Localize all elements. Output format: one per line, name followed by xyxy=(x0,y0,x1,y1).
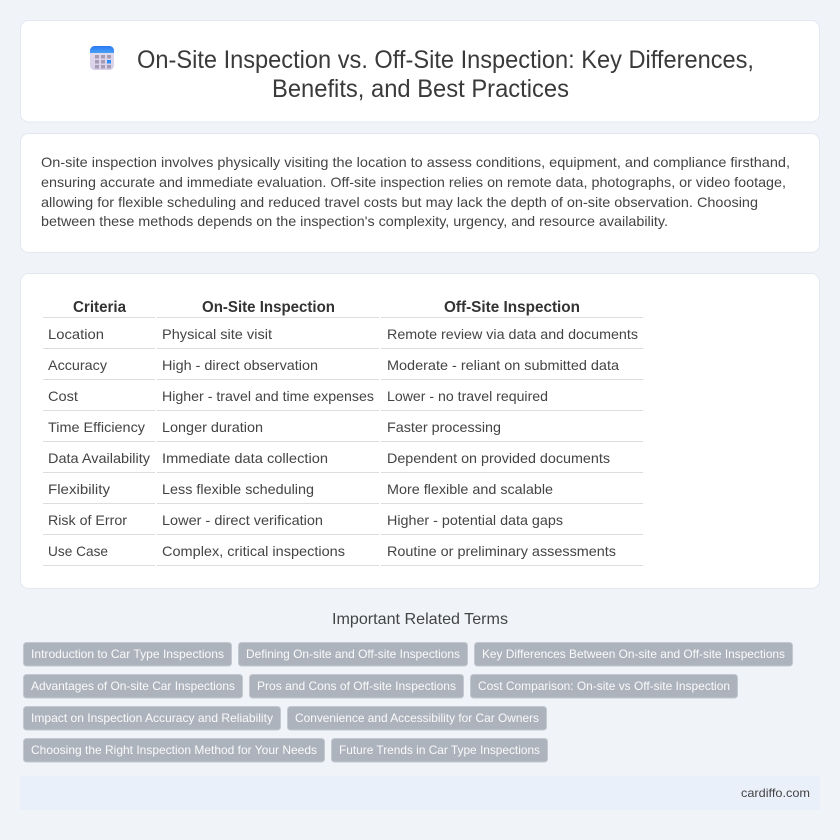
row: Risk of Error xyxy=(48,512,563,528)
row: Cost: Cost xyxy=(48,388,78,404)
icon: calendar xyxy=(90,46,114,70)
row: Accuracy: High - direct observation xyxy=(162,357,318,373)
row: Time Efficiency: Time Efficiency xyxy=(48,419,145,435)
row: Accuracy: Accuracy xyxy=(48,357,107,373)
tag: Future Trends in Car Type Inspections xyxy=(339,743,540,757)
tag xyxy=(250,674,464,698)
row: Use Case: Use Case xyxy=(48,543,108,559)
tag: Convenience and Accessibility for Car Owners xyxy=(295,711,539,725)
row: Time Efficiency xyxy=(48,419,501,435)
tag: Advantages of On-site Car Inspections xyxy=(31,679,235,693)
tag xyxy=(24,738,324,762)
text block: introduction xyxy=(41,154,790,229)
tag xyxy=(238,642,468,666)
panel: introduction xyxy=(20,134,820,252)
text block: introduction: ensuring accurate and immediate evaluation. Off-site inspection relies on remote data, photographs, or video footage, xyxy=(41,174,786,190)
panel: header xyxy=(20,20,820,122)
footer bar xyxy=(20,776,820,810)
row: Location: Location xyxy=(48,326,104,342)
tag xyxy=(24,674,242,698)
tag xyxy=(24,642,232,666)
panel: comparison table xyxy=(20,274,820,588)
tag list: related terms xyxy=(24,642,792,762)
row: Cost xyxy=(48,388,548,404)
tag: Key Differences Between On-site and Off-site Inspections xyxy=(482,647,785,661)
text block: introduction: On-site inspection involves physically visiting the location to assess conditions, equipment, and compliance firsthand, xyxy=(41,154,790,170)
tag xyxy=(470,674,738,698)
table header xyxy=(73,299,580,316)
tag: Defining On-site and Off-site Inspections xyxy=(246,647,460,661)
tag: Pros and Cons of Off-site Inspections xyxy=(257,679,456,693)
row: Location: Physical site visit xyxy=(162,326,272,342)
row: Accuracy xyxy=(48,357,619,373)
text block: introduction: allowing for flexible scheduling and reduced travel costs but may lack the depth of on-site observation. Choosing xyxy=(41,194,758,210)
tag: Impact on Inspection Accuracy and Reliability xyxy=(31,711,273,725)
tag: Choosing the Right Inspection Method for Your Needs xyxy=(31,743,317,757)
row: Time Efficiency: Longer duration xyxy=(162,419,263,435)
row: Use Case: Complex, critical inspections xyxy=(162,543,345,559)
row: Flexibility: More flexible and scalable xyxy=(387,481,553,497)
row: Data Availability: Immediate data collection xyxy=(162,450,328,466)
row: Risk of Error: Lower - direct verification xyxy=(162,512,323,528)
row: Data Availability: Dependent on provided documents xyxy=(387,450,610,466)
row: Cost: Lower - no travel required xyxy=(387,388,548,404)
row: Flexibility: Flexibility xyxy=(48,481,110,497)
row: Use Case: Routine or preliminary assessments xyxy=(387,543,616,559)
title xyxy=(137,46,754,103)
title: On-Site Inspection vs. Off-Site Inspection: Key Differences, xyxy=(137,46,754,74)
tag xyxy=(332,738,548,762)
row: Time Efficiency: Faster processing xyxy=(387,419,501,435)
row: Accuracy: Moderate - reliant on submitted data xyxy=(387,357,619,373)
tag xyxy=(288,706,546,730)
row: Cost: Higher - travel and time expenses xyxy=(162,388,374,404)
row: Flexibility xyxy=(48,481,553,497)
row: Flexibility: Less flexible scheduling xyxy=(162,481,314,497)
row: Data Availability xyxy=(48,450,610,466)
tag: Introduction to Car Type Inspections xyxy=(31,647,224,661)
table header: Criteria xyxy=(73,299,126,316)
tag xyxy=(474,642,792,666)
row: Risk of Error: Higher - potential data gaps xyxy=(387,512,563,528)
table header: On-Site Inspection xyxy=(202,299,335,316)
table header: Off-Site Inspection xyxy=(444,299,580,316)
row: Data Availability: Data Availability xyxy=(48,450,150,466)
footer source text: cardiffo.com xyxy=(741,786,810,800)
row: Use Case xyxy=(48,543,616,559)
tag: Cost Comparison: On-site vs Off-site Inspection xyxy=(478,679,730,693)
row: Risk of Error: Risk of Error xyxy=(48,512,127,528)
row: Location xyxy=(48,326,638,342)
title: Benefits, and Best Practices xyxy=(272,75,569,103)
tag xyxy=(24,706,280,730)
text block: introduction: between these methods depends on the inspection's complexity, urgency, and resource availability. xyxy=(41,213,668,229)
table grid lines xyxy=(43,318,643,566)
row: Location: Remote review via data and documents xyxy=(387,326,638,342)
heading: related terms: Important Related Terms xyxy=(332,611,508,628)
